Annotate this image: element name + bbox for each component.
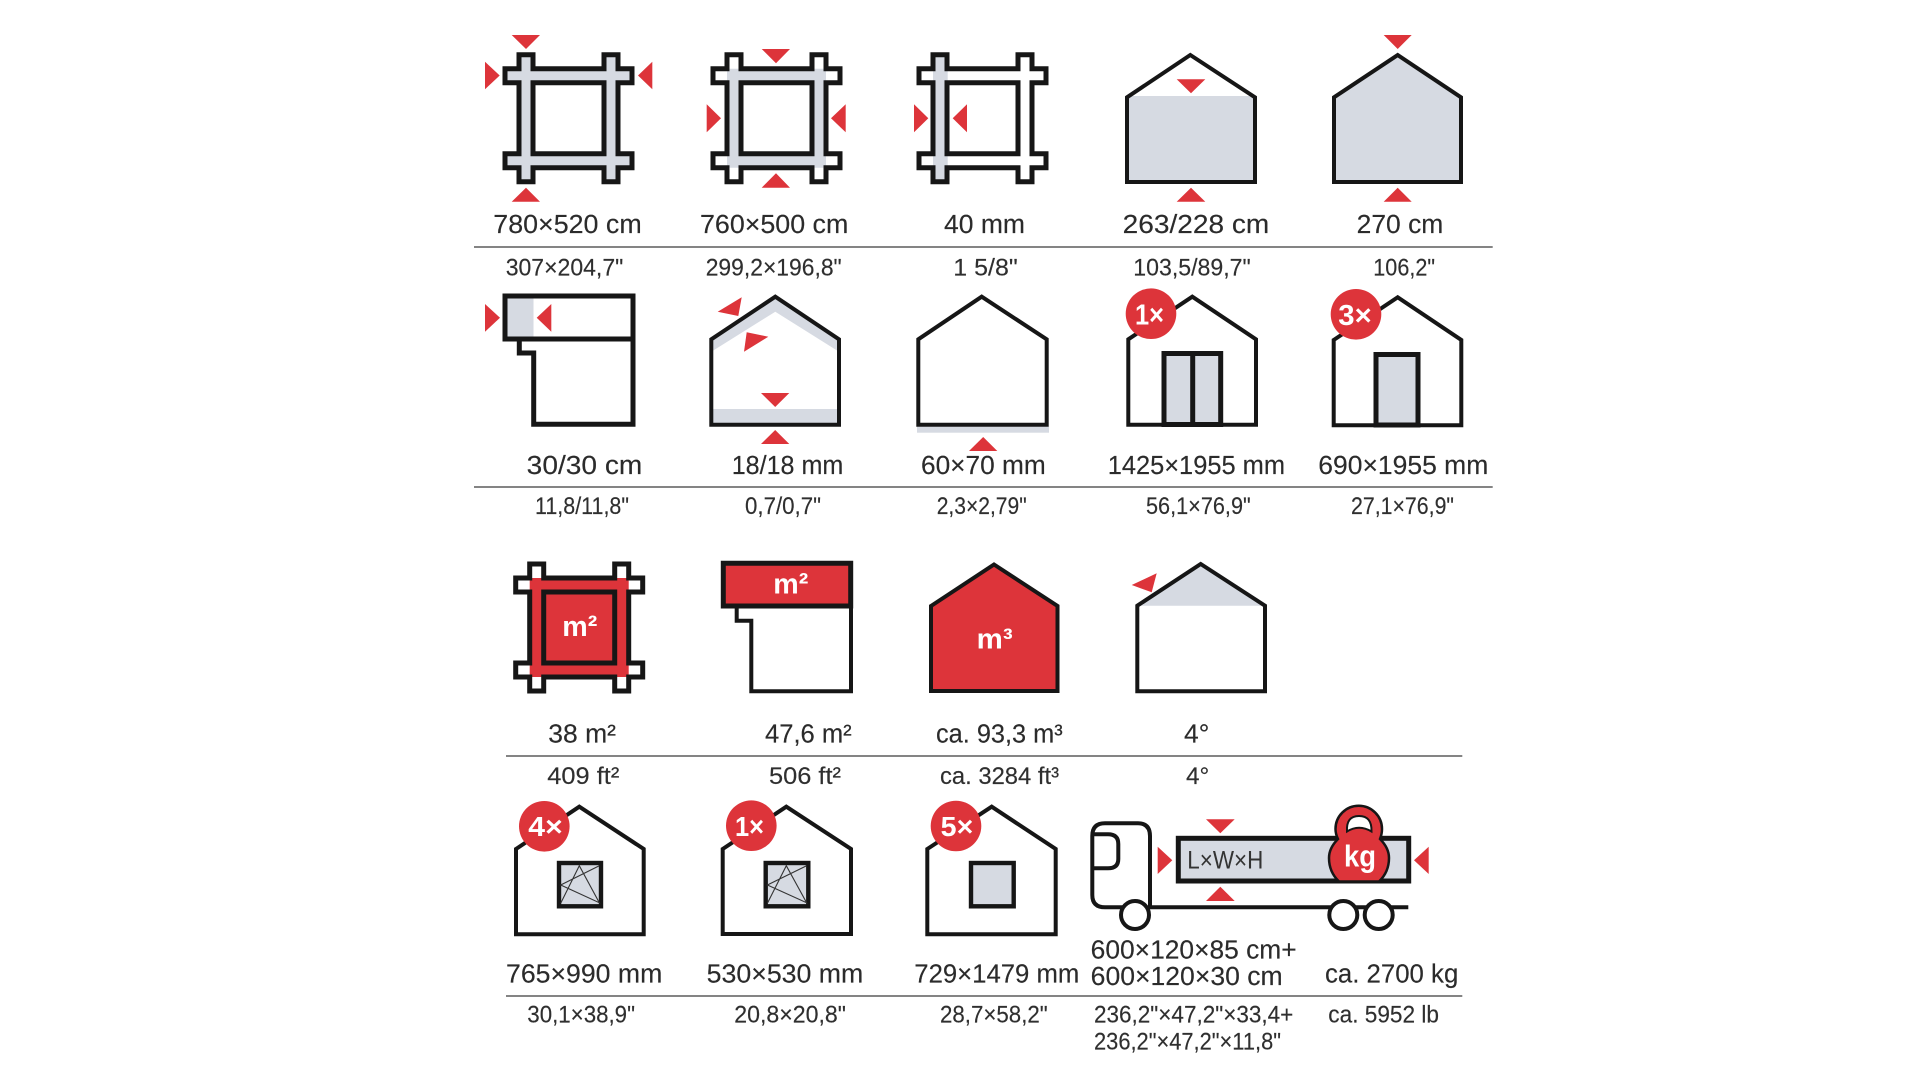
label: 506 ft²: 506 ft²	[769, 763, 841, 790]
icon: volume: m³	[977, 624, 1013, 656]
label: 307×204,7": 307×204,7"	[506, 255, 623, 282]
icon: fixed window, 5×: 5×	[941, 811, 973, 842]
panel: row 2 dimensions	[485, 288, 1488, 520]
label: 236,2"×47,2"×33,4+: 236,2"×47,2"×33,4+	[1094, 1002, 1293, 1029]
icon: roof overhang	[485, 296, 633, 424]
icon: floor area	[516, 564, 643, 691]
panel: row 4 windows and transport	[506, 800, 1458, 1055]
label: 18/18 mm: 18/18 mm	[732, 452, 843, 480]
icon: single door, 3×	[1331, 289, 1461, 425]
label: 1425×1955 mm: 1425×1955 mm	[1108, 452, 1285, 480]
icon: roof area	[723, 563, 851, 691]
label: 780×520 cm: 780×520 cm	[493, 211, 642, 239]
label: 765×990 mm: 765×990 mm	[506, 961, 662, 989]
icon: total height	[1334, 35, 1461, 202]
label: 600×120×30 cm: 600×120×30 cm	[1091, 963, 1283, 991]
label: 1 5/8": 1 5/8"	[953, 255, 1018, 282]
icon: roof and floor thickness	[711, 297, 839, 444]
label: ca. 5952 lb: ca. 5952 lb	[1328, 1002, 1439, 1029]
icon: roof area: m²	[773, 568, 809, 600]
icon: interior height	[1127, 55, 1255, 202]
label: 299,2×196,8": 299,2×196,8"	[706, 255, 842, 282]
label: 690×1955 mm: 690×1955 mm	[1318, 452, 1488, 480]
label: 60×70 mm: 60×70 mm	[921, 452, 1046, 480]
label: 409 ft²: 409 ft²	[547, 763, 619, 790]
icon: tilt-turn window, 4×	[516, 801, 644, 934]
label: ca. 3284 ft³: ca. 3284 ft³	[940, 763, 1059, 790]
icon: inner frame dimensions	[707, 49, 846, 188]
panel: row 1 dimensions	[485, 35, 1461, 282]
label: 2,3×2,79": 2,3×2,79"	[937, 493, 1027, 520]
label: 28,7×58,2": 28,7×58,2"	[940, 1002, 1048, 1029]
label: 600×120×85 cm+: 600×120×85 cm+	[1091, 936, 1297, 964]
label: 0,7/0,7": 0,7/0,7"	[745, 493, 821, 520]
label: 729×1479 mm: 729×1479 mm	[914, 961, 1079, 989]
label: 270 cm: 270 cm	[1357, 211, 1443, 239]
label: ca. 2700 kg: ca. 2700 kg	[1325, 961, 1458, 989]
label: 11,8/11,8": 11,8/11,8"	[535, 493, 629, 520]
panel: row 3 areas and roof pitch	[516, 563, 1265, 790]
icon: transport truck with package and weight: kg	[1344, 839, 1376, 874]
icon: transport truck with package and weight: L×W×H	[1187, 846, 1263, 874]
label: 760×500 cm: 760×500 cm	[700, 211, 848, 239]
icon: volume	[931, 564, 1058, 691]
icon: tilt-turn window, 1×: 1×	[735, 811, 764, 842]
label: 56,1×76,9": 56,1×76,9"	[1146, 493, 1251, 520]
icon: tilt-turn window, 1×	[723, 800, 851, 934]
label: ca. 93,3 m³: ca. 93,3 m³	[936, 721, 1063, 749]
label: 106,2": 106,2"	[1373, 255, 1435, 282]
icon: foundation beam	[917, 297, 1049, 451]
label: 47,6 m²: 47,6 m²	[765, 721, 852, 749]
icon: wall thickness	[914, 55, 1046, 182]
label: 30,1×38,9": 30,1×38,9"	[527, 1002, 635, 1029]
label: 236,2"×47,2"×11,8": 236,2"×47,2"×11,8"	[1094, 1028, 1281, 1055]
icon: roof pitch	[1132, 564, 1265, 691]
icon: tilt-turn window, 4×: 4×	[528, 811, 563, 842]
icon: outer frame dimensions	[485, 35, 652, 202]
label: 263/228 cm: 263/228 cm	[1123, 211, 1269, 239]
label: 27,1×76,9": 27,1×76,9"	[1351, 493, 1454, 520]
label: 4°: 4°	[1184, 721, 1209, 749]
icon: double door, 1×	[1126, 288, 1256, 425]
label: 38 m²: 38 m²	[548, 721, 616, 749]
label: 30/30 cm: 30/30 cm	[527, 452, 642, 480]
label: 4° imperial: 4°	[1186, 763, 1209, 790]
label: 103,5/89,7": 103,5/89,7"	[1133, 255, 1251, 282]
icon: fixed window, 5×	[927, 801, 1056, 934]
icon: floor area: m²	[562, 611, 598, 643]
icon: transport truck with package and weight	[1092, 806, 1429, 929]
icon: double door, 1×: 1×	[1135, 299, 1164, 331]
label: 20,8×20,8": 20,8×20,8"	[734, 1002, 846, 1029]
icon: single door, 3×: 3×	[1338, 300, 1372, 332]
label: 40 mm: 40 mm	[944, 211, 1025, 239]
label: 530×530 mm: 530×530 mm	[707, 961, 863, 989]
